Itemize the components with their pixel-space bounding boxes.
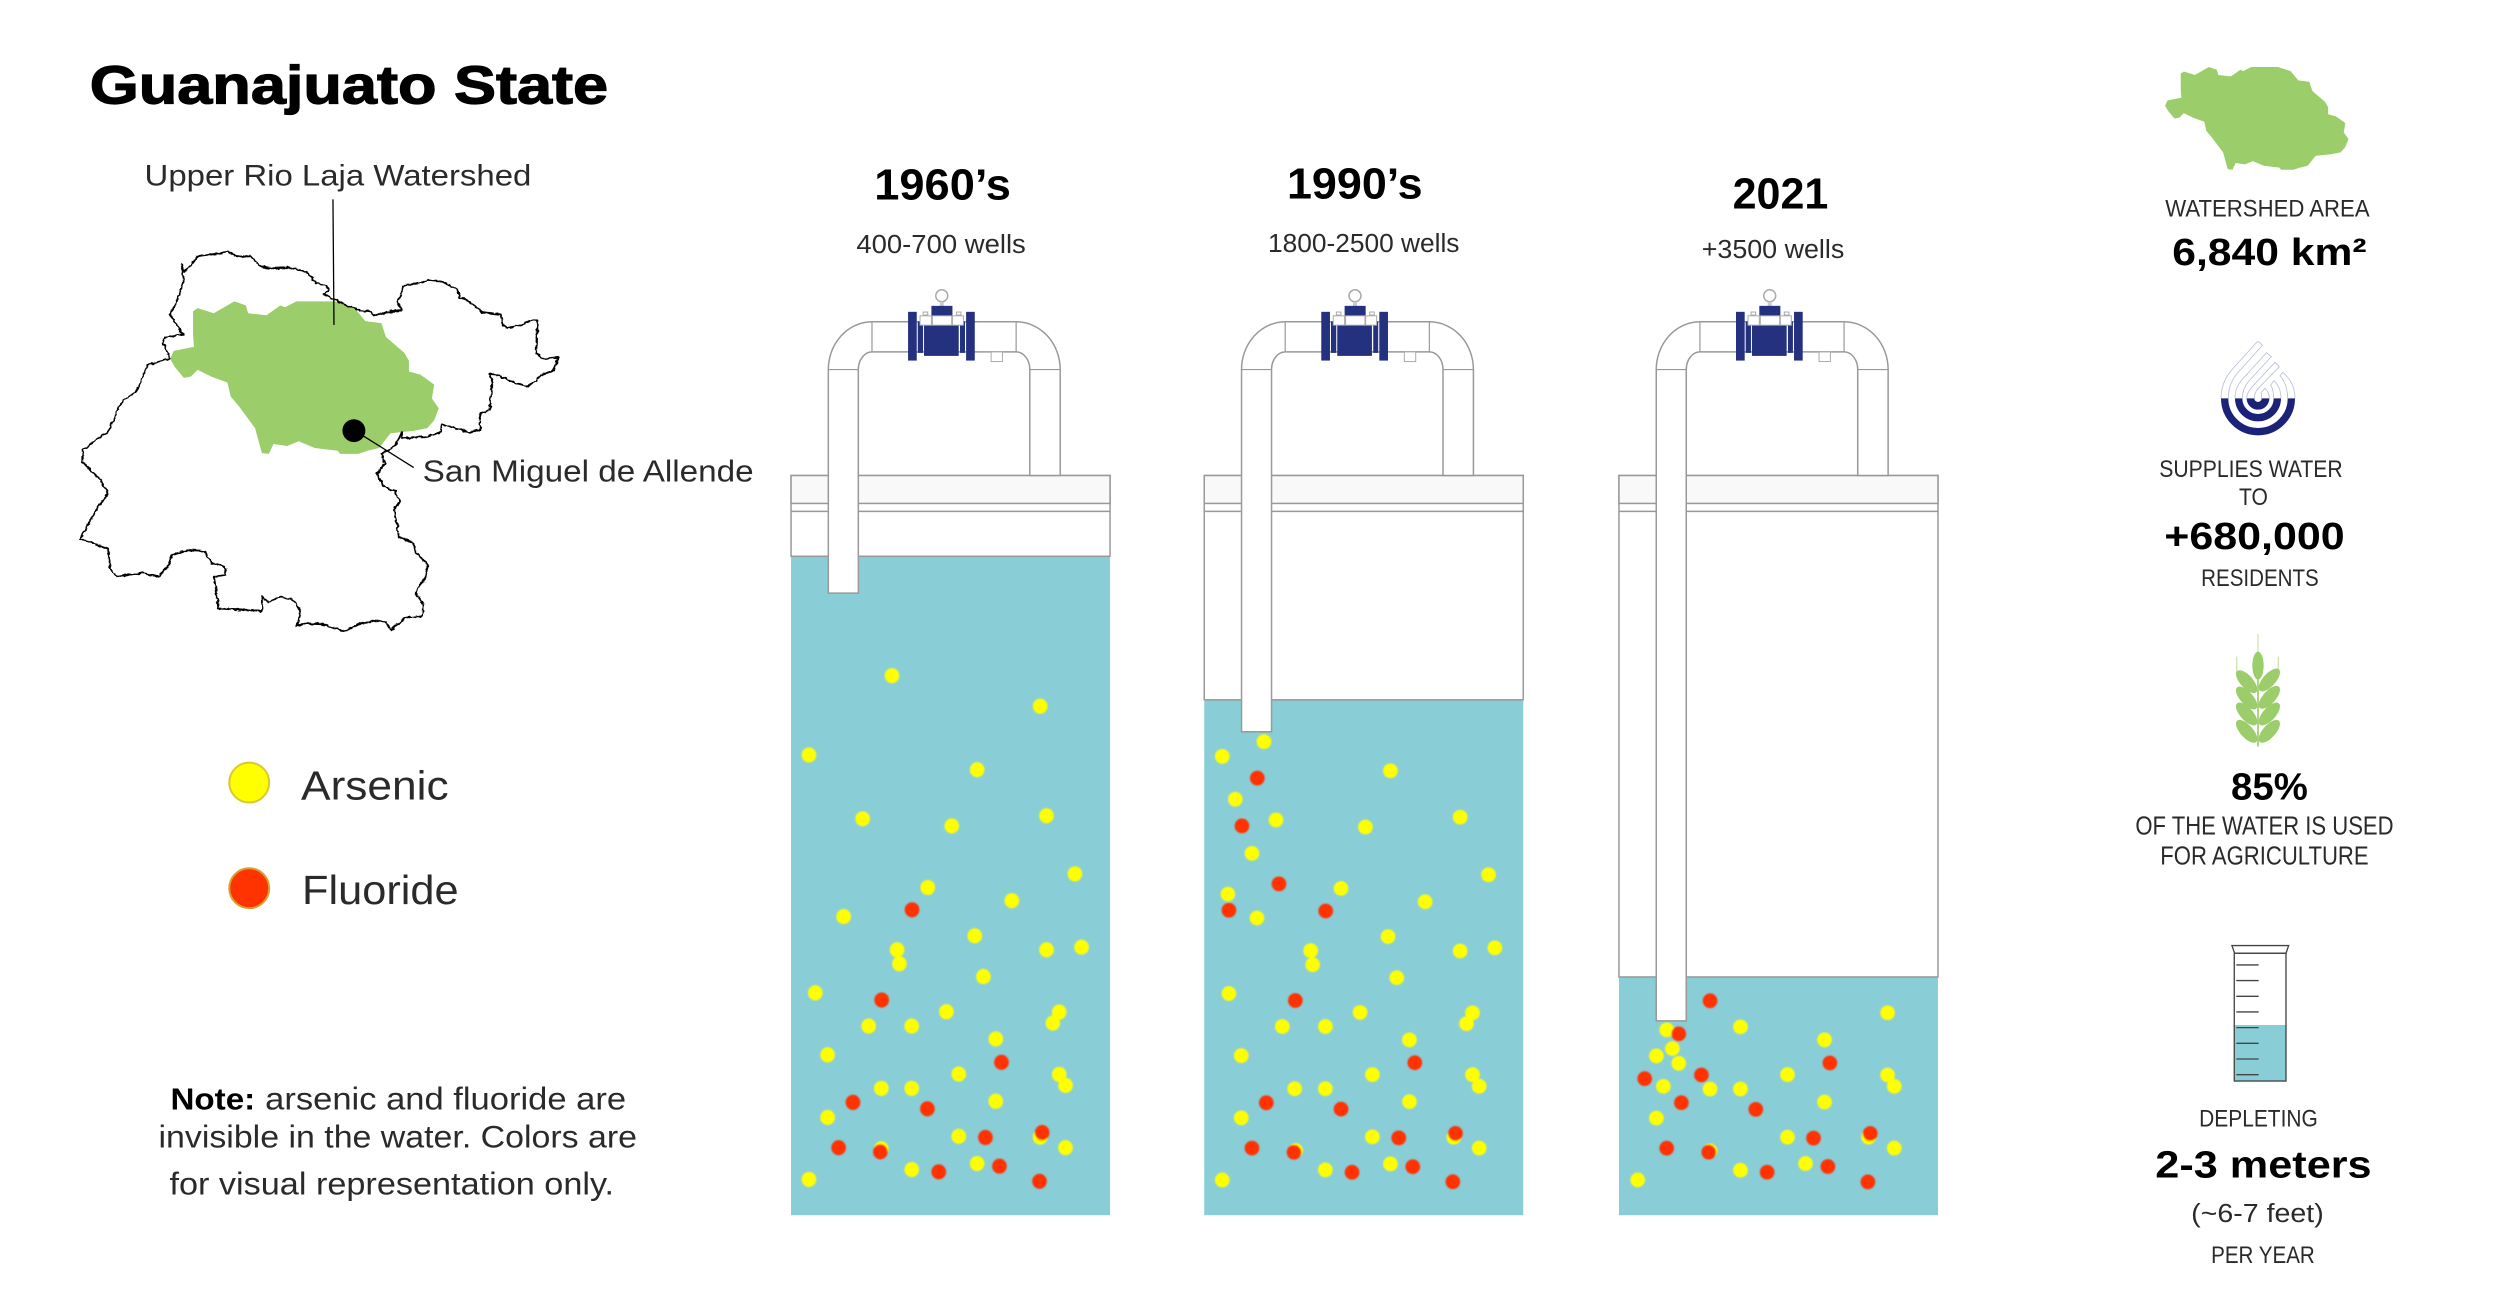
stat value: 2-3 meters: 2-3 meters (2155, 1144, 2372, 1186)
stat label: feet: (~6-7 feet) (2191, 1200, 2324, 1228)
pipe 1960s (828, 322, 1060, 593)
label: watershed: Upper Rio Laja Watershed (145, 159, 531, 192)
state outline (80, 252, 558, 631)
icon: water drop (2221, 342, 2295, 432)
note: Note: (170, 1082, 255, 1117)
subheading: 400-700 wells: 400-700 wells (856, 231, 1026, 259)
leader line: San Miguel (363, 436, 414, 468)
marker: San Miguel de Allende (342, 419, 365, 442)
leader line: watershed (332, 199, 335, 325)
note (159, 1081, 637, 1201)
watershed area on map (170, 301, 439, 454)
stat label: per year: PER YEAR (2211, 1242, 2315, 1269)
title: Guanajuato State (90, 56, 608, 116)
note: for visual representation only. (169, 1165, 614, 1201)
map: Guanajuato state with watershed (80, 159, 754, 631)
subheading: 1800-2500 wells: 1800-2500 wells (1268, 230, 1460, 258)
heading: 2021: 2021 (1733, 169, 1828, 218)
pump meter 1960s (908, 290, 975, 361)
heading: 1990's: 1990’s (1287, 159, 1423, 208)
ground above water 1960s (791, 476, 1110, 556)
label: San Miguel de Allende: San Miguel de Allende (423, 454, 754, 489)
contaminant dots 2021 (1630, 993, 1902, 1189)
panel: well 1960s (791, 290, 1110, 1215)
legend: fluoride label: Fluoride (302, 867, 459, 913)
legend: fluoride dot (229, 868, 269, 908)
note: invisible in the water. Colors are (159, 1118, 637, 1154)
subheading: +3500 wells: +3500 wells (1702, 236, 1844, 264)
water 1960s (791, 556, 1110, 1215)
stat label: supplies water to: TO (2239, 484, 2268, 511)
stat label: supplies water to: SUPPLIES WATER (2159, 456, 2343, 483)
water 1990s (1204, 700, 1523, 1215)
contaminant dots 1990s (1215, 734, 1502, 1189)
stat label: supplies water to (2159, 456, 2343, 511)
pipe and pump 1990s (1242, 290, 1473, 732)
icon: watershed shape (2165, 67, 2348, 170)
stat value: area: 6,840 km² (2172, 232, 2367, 274)
ground above water 1990s (1204, 476, 1523, 700)
stat label: agriculture use: FOR AGRICULTURE (2160, 842, 2369, 870)
icon: wheat (2232, 634, 2284, 747)
legend (229, 763, 459, 913)
panel: well 2021 (1619, 290, 1938, 1215)
icon: graduated cylinder (2232, 946, 2289, 1081)
heading: 1960's: 1960’s (874, 160, 1011, 209)
stat value: 85%: 85% (2231, 767, 2308, 809)
contaminant dots 1960s (802, 668, 1089, 1189)
legend: arsenic label: Arsenic (301, 763, 449, 809)
legend: arsenic dot (229, 763, 269, 803)
panel: well 1990s (1204, 290, 1523, 1215)
stat label: agriculture use (2135, 812, 2394, 870)
stat label: depleting: DEPLETING (2199, 1105, 2318, 1132)
stat label: residents: RESIDENTS (2201, 565, 2319, 592)
stat label: watershed area: WATERSHED AREA (2165, 195, 2370, 222)
note: arsenic and fluoride are (265, 1081, 626, 1117)
ground above water 2021 (1619, 476, 1938, 977)
stat label: agriculture use: OF THE WATER IS USED (2135, 812, 2394, 840)
water 2021 (1619, 977, 1938, 1215)
stat value: residents: +680,000 (2164, 516, 2345, 558)
pipe and pump 2021 (1656, 290, 1888, 1021)
